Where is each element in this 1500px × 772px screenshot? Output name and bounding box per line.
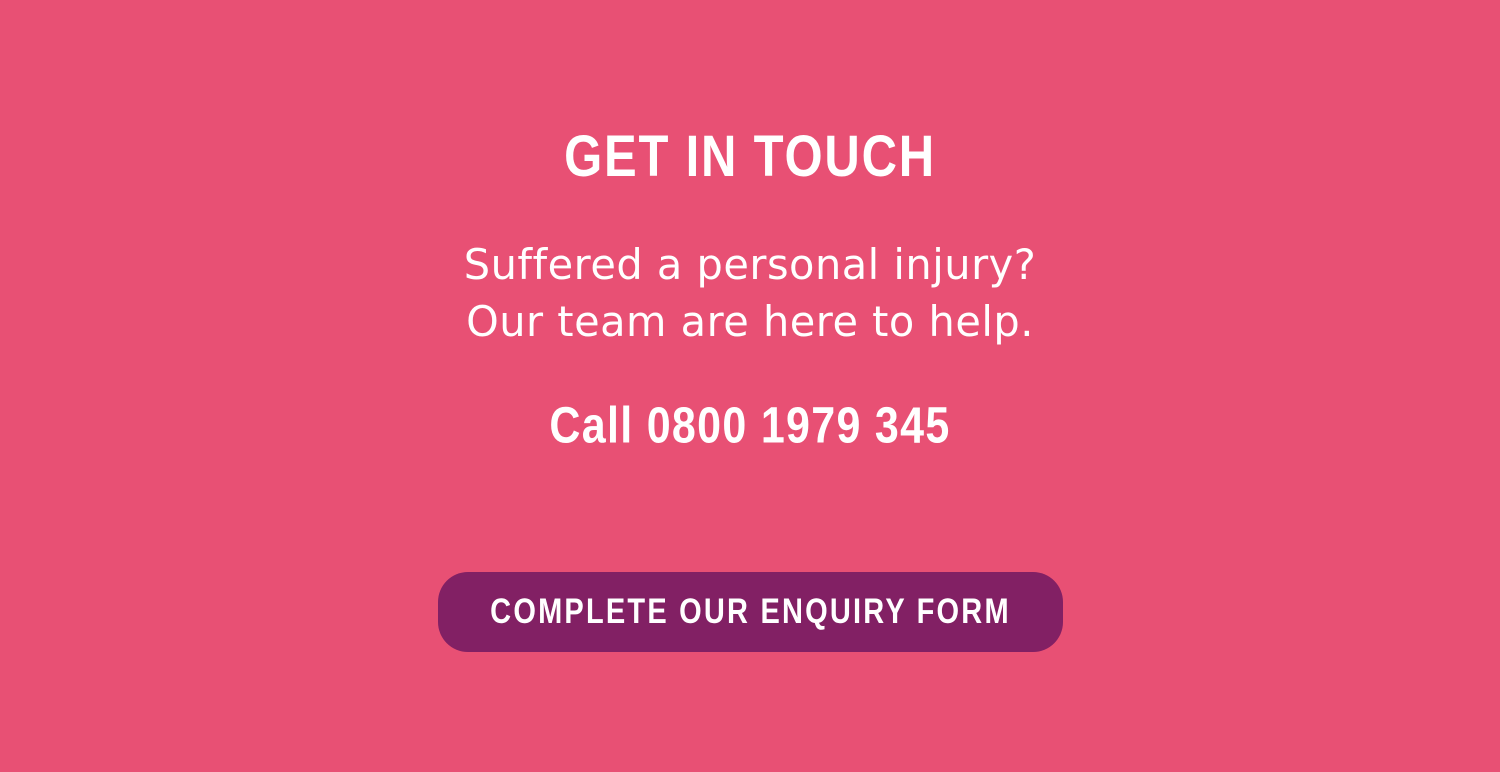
subtitle text: Suffered a personal injury? xyxy=(464,240,1036,289)
button label: COMPLETE OUR ENQUIRY FORM xyxy=(490,592,1011,632)
title: GET IN TOUCH xyxy=(564,125,936,189)
subtitle text: Our team are here to help. xyxy=(466,297,1034,346)
button: enquiry form xyxy=(438,572,1063,652)
subtitle text xyxy=(464,240,1036,346)
phone number: Call 0800 1979 345 xyxy=(549,398,951,454)
